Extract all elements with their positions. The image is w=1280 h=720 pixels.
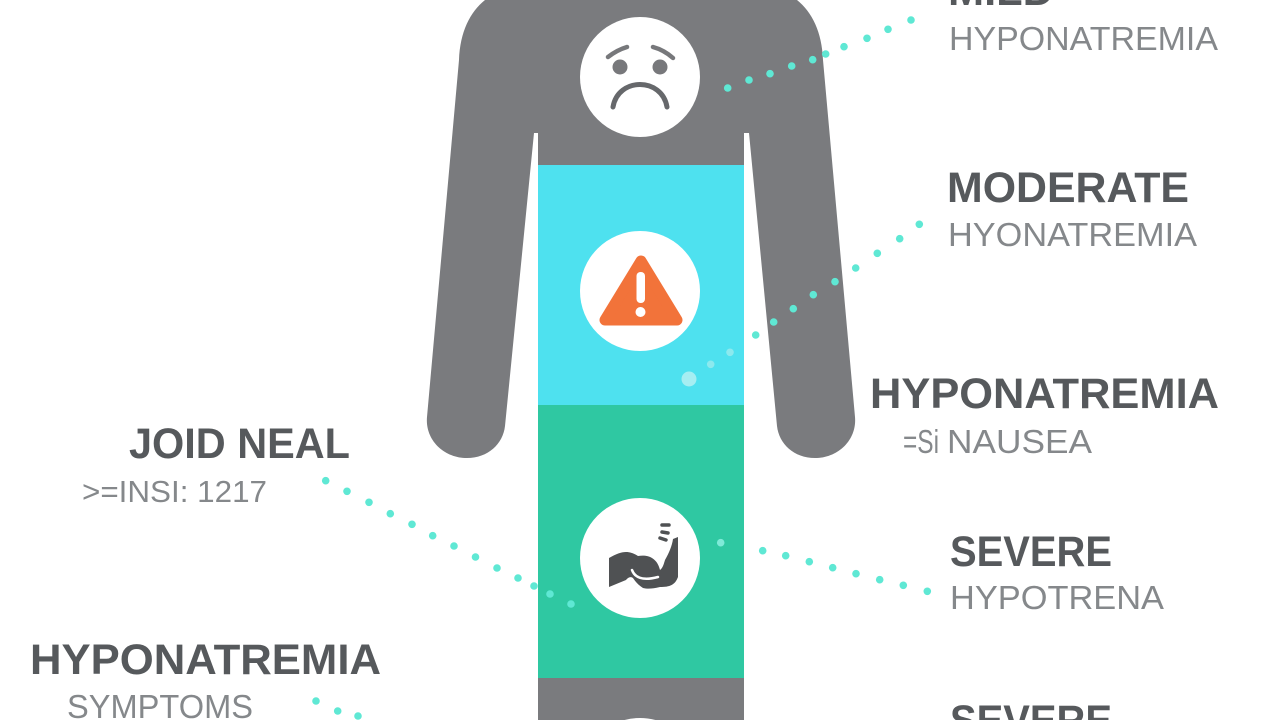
label: severe hypotrena: SEVERE <box>950 528 1112 576</box>
label: severe hypotrena: HYPOTRENA <box>950 579 1164 616</box>
label: moderate hyonatremia <box>947 164 1197 253</box>
torso band: moderate <box>538 165 744 405</box>
dotted connector: mild <box>724 16 915 92</box>
label: joid neal: JOID NEAL <box>129 420 350 468</box>
dotted connector: joid neal <box>322 477 575 608</box>
label: joid neal: >=INSI: 1217 <box>82 474 267 509</box>
label: severe hypotrena <box>950 528 1164 616</box>
label: hyponatremia symptoms <box>30 636 381 720</box>
label: hyponatremia nausea <box>870 370 1219 460</box>
icon: sad face <box>580 17 700 137</box>
dotted connector: severe <box>717 539 931 595</box>
label: mild hyponatremia <box>948 0 1218 57</box>
label: hyponatremia symptoms: HYPONATREMIA <box>30 636 381 684</box>
torso band: severe <box>538 405 744 678</box>
dotted connector: symptoms <box>312 697 362 720</box>
body silhouette <box>427 0 855 720</box>
label: joid neal <box>82 420 350 509</box>
label: moderate hyonatremia: HYONATREMIA <box>948 216 1197 253</box>
icon: partial circle at bottom <box>625 718 655 720</box>
human figure <box>427 0 855 720</box>
label: mild hyponatremia: HYPONATREMIA <box>949 20 1218 57</box>
label: hyponatremia nausea: =Si <box>903 423 939 460</box>
dotted connector: moderate <box>682 220 923 386</box>
icon: flexed arm <box>580 498 700 618</box>
label: hyponatremia nausea: NAUSEA <box>947 423 1092 460</box>
label: moderate hyonatremia: MODERATE <box>947 164 1189 212</box>
label: hyponatremia nausea: HYPONATREMIA <box>870 370 1219 418</box>
icon: warning triangle <box>580 231 700 351</box>
